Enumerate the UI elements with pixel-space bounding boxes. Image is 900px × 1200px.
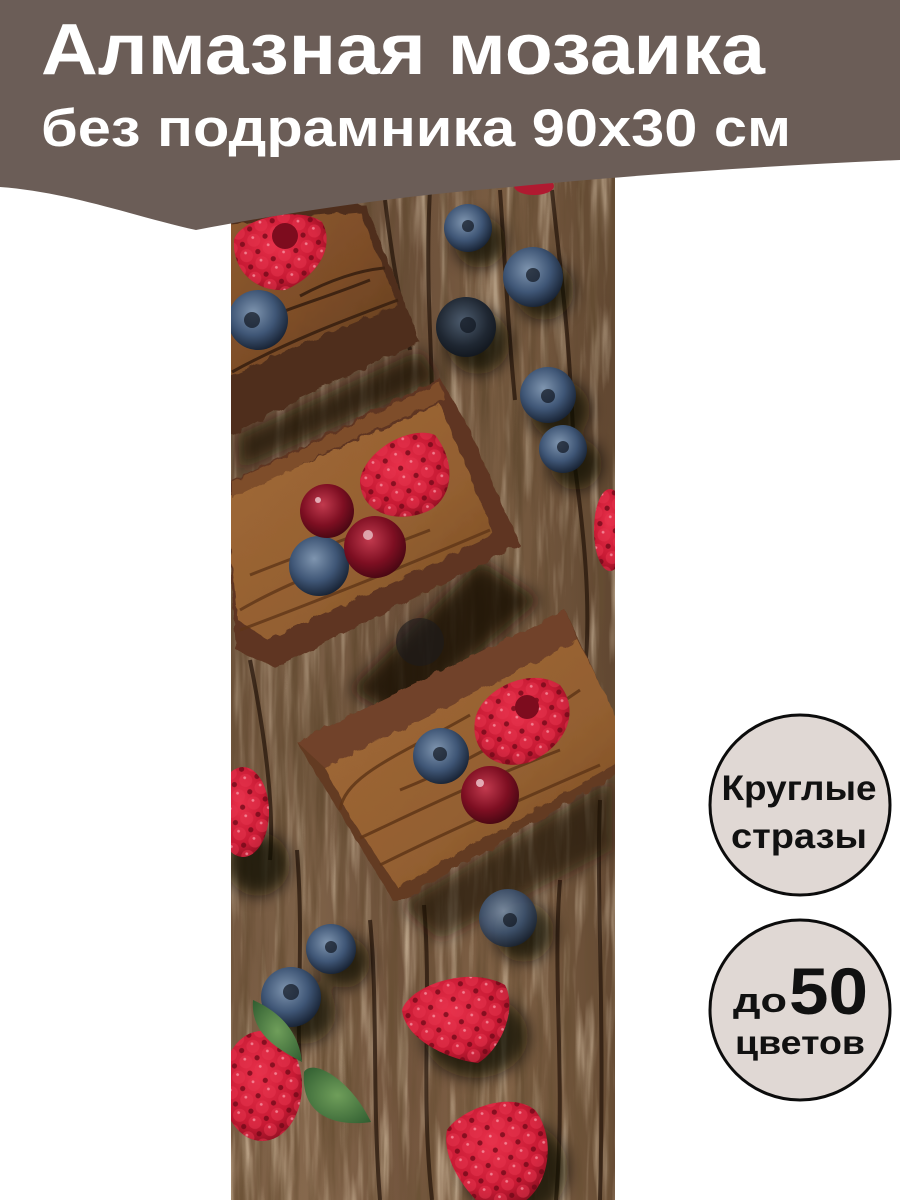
badge: round rhinestones: Круглые [722,769,876,808]
badge: up to 50 colours [710,920,890,1100]
blueberries [228,204,587,1027]
badge: up to 50 colours: цветов [735,1024,865,1061]
badge: up to 50 colours: 50 [789,954,868,1028]
berry shadows [226,216,602,1200]
panel: mosaic picture of brownies and berries [217,170,626,1200]
brownie 2 [225,378,520,668]
header banner [0,0,900,230]
mint leaves [253,1000,371,1123]
raspberries [217,177,626,1200]
badge: round rhinestones [710,715,890,895]
title: Алмазная мозаика [41,10,766,90]
wooden board background [231,170,615,1200]
brownie 1 [220,204,420,436]
cherries [300,484,519,824]
badge: up to 50 colours: до [733,982,787,1020]
subtitle: без подрамника 90х30 см [41,99,791,158]
badge: round rhinestones: стразы [731,817,867,856]
brownie 3 [297,610,625,903]
